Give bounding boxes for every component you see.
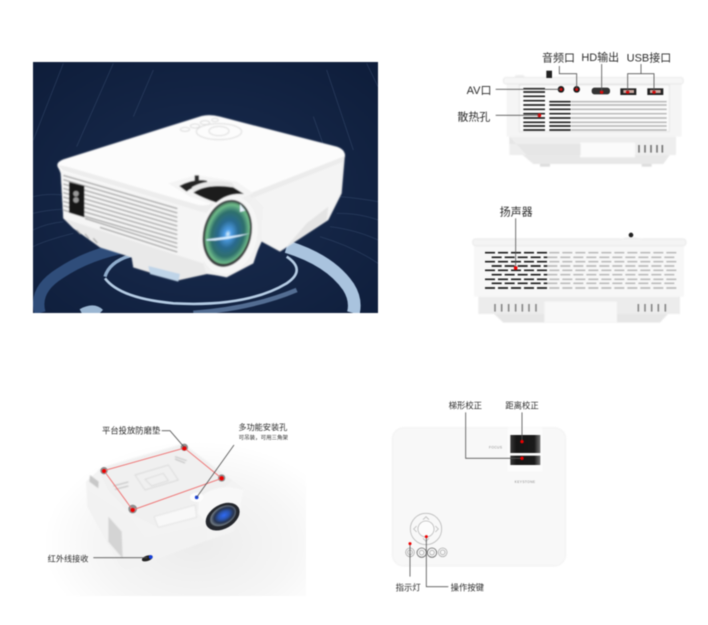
bottom vents	[495, 304, 665, 312]
label: HD output: HD输出	[581, 50, 619, 64]
left side with vents	[61, 182, 202, 262]
FOCUS print: FOCUS	[489, 445, 503, 449]
focus wheel	[510, 435, 540, 453]
leader lines	[93, 431, 234, 558]
label: focus correction: 距离校正	[505, 400, 539, 410]
body silhouette	[86, 443, 243, 570]
speaker leader line and marker	[514, 218, 517, 270]
lens	[211, 199, 220, 209]
focus wheels	[168, 175, 253, 207]
right side	[250, 158, 342, 250]
bottom vents	[639, 145, 662, 153]
projector underside body	[86, 443, 243, 570]
label: operation buttons: 操作按键	[451, 582, 485, 592]
markers	[102, 446, 224, 512]
lens support	[216, 250, 258, 278]
power socket	[69, 182, 84, 217]
keystone wheel	[510, 456, 540, 465]
label: anti-wear pads: 平台投放防磨垫	[102, 426, 161, 436]
top shell	[392, 428, 566, 566]
label: indicator light: 指示灯	[396, 582, 421, 592]
knob	[546, 71, 552, 78]
rubber feet	[100, 444, 225, 513]
bottom plate	[98, 445, 232, 527]
lens	[201, 497, 245, 536]
vent slots	[523, 89, 571, 130]
front edge shading	[87, 490, 207, 570]
white backdrop with shadow	[30, 410, 306, 596]
label: multifunction mount: 多功能安装孔	[238, 422, 287, 432]
projector side body	[473, 237, 686, 323]
panel: underside view	[30, 410, 306, 596]
label: mount note: 可吊装，可用三角架	[239, 433, 289, 441]
knob	[629, 233, 633, 237]
label: USB port: USB接口	[627, 51, 671, 64]
top shell	[57, 115, 345, 212]
photo background	[33, 62, 378, 313]
leader lines	[496, 64, 654, 115]
panel: speaker side view	[473, 205, 686, 323]
body silhouette	[58, 157, 346, 280]
red rectangle between feet	[104, 448, 222, 510]
label: audio jack: 音频口	[542, 50, 575, 64]
panel: rear ports view	[457, 50, 683, 167]
IR receiver	[141, 554, 154, 563]
projector body	[57, 115, 345, 282]
small buttons	[406, 548, 447, 557]
leader lines	[410, 412, 522, 587]
panel: hero projector photo on dark background	[33, 62, 378, 313]
KEYSTONE print: KEYSTONE	[515, 480, 536, 484]
mount hole	[190, 493, 203, 502]
projector rear body	[503, 75, 683, 167]
direction pad	[410, 513, 442, 545]
control buttons	[180, 118, 242, 140]
underside feet	[63, 218, 207, 281]
label: speaker: 扬声器	[500, 205, 533, 219]
red markers	[537, 88, 656, 117]
label: infrared receiver: 红外线接收	[48, 553, 88, 563]
red markers	[408, 440, 524, 545]
label: keystone correction: 梯形校正	[449, 400, 482, 410]
speaker slots	[485, 253, 547, 288]
label: heat vent: 散热孔	[457, 110, 490, 124]
concentric rings on the floor	[39, 247, 354, 313]
panel: top view with controls	[392, 400, 566, 592]
label: AV port: AV口	[467, 85, 491, 97]
ports	[558, 86, 564, 93]
